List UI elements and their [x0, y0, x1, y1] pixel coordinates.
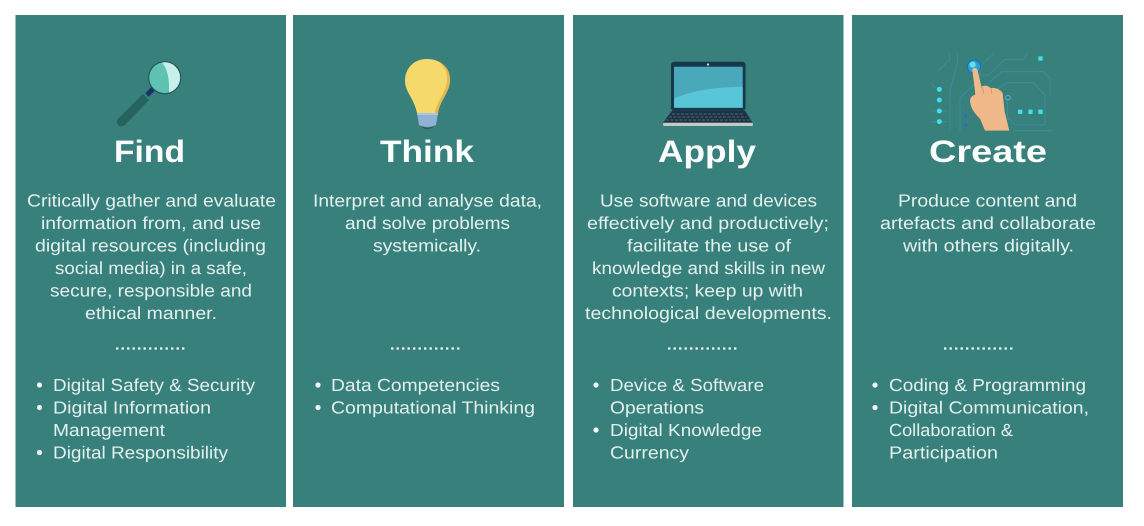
list: create competencies: Collaboration & — [889, 420, 1013, 440]
panel: think — [293, 15, 564, 507]
list: apply competencies: Operations — [610, 398, 704, 418]
description: apply: knowledge and skills in new — [592, 258, 825, 278]
heading: Find: Find — [114, 134, 185, 169]
description: find: information from, and use — [41, 213, 261, 233]
description: create: artefacts and collaborate — [880, 213, 1096, 233]
heading: Think: Think — [380, 134, 475, 169]
divider dots — [668, 347, 736, 350]
heading: Create: Create — [929, 134, 1047, 169]
description: find — [27, 190, 276, 323]
list: find competencies: Management — [53, 420, 165, 440]
list: apply competencies: Digital Knowledge — [610, 420, 762, 440]
description: apply: contexts; keep up with — [612, 280, 803, 300]
list: create competencies: Digital Communication, — [889, 398, 1089, 418]
panel: create — [852, 15, 1123, 507]
divider dots — [391, 347, 459, 350]
list: think competencies — [315, 375, 535, 418]
divider dots — [116, 347, 184, 350]
icon: laptop — [663, 62, 753, 126]
description: create — [880, 190, 1096, 256]
list: create competencies: Coding & Programming — [889, 375, 1086, 395]
description: apply: technological developments. — [585, 303, 832, 323]
list: find competencies: Digital Responsibility — [53, 442, 228, 462]
description: find: social media) in a safe, — [55, 258, 247, 278]
description: apply: Use software and devices — [600, 190, 817, 210]
description: apply: facilitate the use of — [627, 236, 791, 256]
list: apply competencies: Device & Software — [610, 375, 764, 395]
list: find competencies: Digital Information — [53, 398, 211, 418]
description: find: secure, responsible and — [50, 280, 252, 300]
description: think: Interpret and analyse data, — [313, 190, 542, 210]
divider dots — [944, 347, 1012, 350]
description: create: Produce content and — [898, 190, 1077, 210]
description: find: ethical manner. — [85, 303, 217, 323]
description: think: and solve problems — [345, 213, 510, 233]
description: think — [313, 190, 542, 256]
list: create competencies — [872, 375, 1089, 462]
description: apply: effectively and productively; — [587, 213, 829, 233]
list: apply competencies: Currency — [610, 442, 689, 462]
description: find: Critically gather and evaluate — [27, 190, 276, 210]
panel: apply — [573, 15, 844, 507]
list: create competencies: Participation — [889, 442, 998, 462]
list: think competencies: Computational Thinking — [331, 398, 535, 418]
panel: find — [16, 15, 286, 507]
icon: hand touching circuit — [932, 53, 1052, 131]
description: think: systemically. — [373, 236, 481, 256]
heading: Apply: Apply — [658, 134, 757, 169]
description: create: with others digitally. — [902, 236, 1074, 256]
icon: light bulb — [405, 59, 450, 128]
description: find: digital resources (including — [35, 236, 266, 256]
list: find competencies — [37, 375, 255, 462]
list: think competencies: Data Competencies — [331, 375, 500, 395]
list: find competencies: Digital Safety & Security — [53, 375, 255, 395]
description: apply — [585, 190, 832, 323]
icon: magnifying glass — [117, 61, 181, 126]
list: apply competencies — [593, 375, 764, 462]
